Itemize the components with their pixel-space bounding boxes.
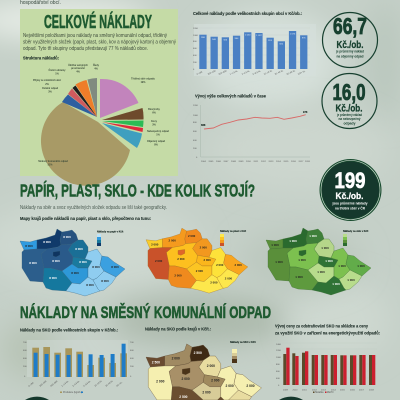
axis labels: 200 (130, 366, 134, 368)
axis labels: 2010 (246, 161, 252, 163)
legend: green map (343, 230, 368, 246)
value labels: 2 500 (194, 351, 202, 355)
axis labels: 2011 (302, 390, 307, 392)
value labels: 8 000 (25, 244, 33, 248)
axis labels: 2017 (359, 390, 365, 392)
legend: brown map (230, 341, 256, 363)
axis labels: 200 (193, 62, 197, 64)
badge: 66,7 Kč per person (322, 12, 378, 68)
axis labels: 800 (276, 364, 280, 366)
axis labels: 600 (276, 371, 280, 373)
pie labels: Tříděný sběr odpadu (131, 78, 155, 80)
badge: 16,0 Kč per person: na nebezpečný (338, 117, 361, 121)
legend: blue map: Náklady na papír v Kč/t (97, 230, 124, 234)
axis labels: 2009 (283, 390, 289, 392)
axis labels: 1000 (193, 35, 199, 37)
axis labels: 800 (193, 41, 197, 43)
value labels: 8 000 (71, 271, 79, 275)
value labels: 1 000 (309, 234, 317, 238)
value labels: 2 500 (179, 395, 188, 399)
axis labels: 2015 (284, 161, 289, 163)
badge: bottom right (279, 397, 303, 400)
legend: ZEVO (327, 391, 334, 394)
value labels: 1 000 (347, 278, 355, 282)
chart: cost trend over time (193, 92, 311, 163)
axis labels: 400 (193, 140, 197, 142)
value labels: 2 000 (188, 234, 196, 238)
value labels: 8 000 (86, 283, 94, 287)
value labels: 2 000 (200, 245, 207, 249)
pie labels: Objemný odpad (147, 140, 166, 143)
data labels: 668 (201, 123, 206, 127)
chart: landfill vs energy recovery price: za využití SKO v zařízení na energetickývyužití odpadů: (275, 330, 380, 336)
axis labels: 2007 (224, 161, 229, 163)
panel: celkové náklady (20, 9, 178, 186)
legend: blue map (97, 230, 124, 246)
axis labels: 0 (24, 376, 26, 378)
axis labels: 100+ tis. (297, 70, 306, 76)
pie labels: Ostatní odpad (42, 87, 59, 90)
value labels: 2 000 (210, 280, 218, 284)
chart title: Náklady na SKO podle velikostních skupin v Kč/ob.: (20, 328, 118, 334)
axis labels: 0 (196, 157, 198, 159)
badge: bottom left (25, 397, 49, 400)
axis labels: 1–1,9 tis. (61, 380, 70, 388)
value labels: 8 000 (52, 259, 60, 263)
pie labels: 4% (94, 68, 99, 70)
value labels: 8 000 (49, 276, 57, 280)
value labels: 2 000 (169, 239, 176, 243)
value labels: 2 000 (177, 257, 185, 261)
value labels: 2 000 (225, 384, 234, 388)
chart title: Celkové náklady podle velikostních skupin obcí v Kč/ob.: (193, 11, 302, 17)
axis labels: 500–999 (219, 70, 228, 76)
value labels: 1 000 (271, 243, 279, 247)
bar values: 913 (268, 40, 273, 42)
axis labels: 2–4,9 tis. (72, 380, 81, 388)
badge: 16,0 Kč per person (322, 74, 377, 128)
pie labels: 4% (76, 70, 81, 74)
axis labels: 20–49 tis. (105, 379, 114, 388)
value labels: 8 000 (63, 235, 71, 239)
axis labels: 2016 (350, 390, 356, 392)
axis labels: 500–999 (50, 380, 59, 388)
axis labels: 0–199 (197, 71, 204, 76)
heading: směsný komunální odpad: NÁKLADY NA SMĚSNÝ KOMUNÁLNÍ ODPAD (20, 303, 271, 322)
legend: orange map: Náklady na plast v Kč/t (220, 230, 246, 233)
pie labels: 3% (48, 90, 53, 94)
badge: 16,0 Kč per person: je průměrný náklad (336, 113, 362, 117)
pie labels: Směsný komunální odpad (38, 160, 68, 163)
chart: landfill vs energy recovery price (275, 324, 380, 394)
badge: 16,0 Kč per person: odpady (344, 122, 356, 126)
value labels (25, 235, 119, 287)
legend: orange map (220, 230, 246, 246)
value labels: 2 000 (211, 378, 220, 382)
axis labels: 20–49 tis. (274, 69, 284, 76)
value labels: 1 000 (332, 282, 340, 286)
value labels: 1 000 (357, 264, 365, 268)
legend: Skládka (315, 391, 324, 394)
axis labels: 2014 (331, 390, 337, 392)
value labels (152, 351, 255, 399)
bar values: 1 050 (245, 34, 251, 36)
bar values: 976 (302, 38, 306, 40)
axis labels: 1200 (193, 105, 199, 107)
axis labels: 2006 (216, 161, 222, 163)
heading: papír, plast, sklo: PAPÍR, PLAST, SKLO - KDE KOLIK STOJÍ? (20, 180, 255, 200)
axis labels: 0–199 (28, 382, 35, 388)
badge: 16,0 Kč per person: 16,0 (332, 79, 366, 105)
bar values: 1 076 (290, 34, 296, 36)
pie labels: 6% (152, 112, 157, 114)
axis labels: 1200 (193, 28, 199, 30)
value labels: 2 000 (181, 377, 190, 381)
axis labels: 5–9,9 tis. (252, 69, 262, 76)
subheading: map caption: Mapy krajů podle nákladů na papír, plast a sklo, přepočteno na tunu: (20, 215, 151, 222)
map: paper plastic glass blue (20, 229, 125, 296)
legend (313, 391, 334, 394)
axis labels: 2016 (291, 161, 297, 163)
badge: 199 Kč per person: na třídění sběr v ČR (335, 206, 366, 210)
axis labels: 400 (276, 378, 280, 380)
axis labels: 1400 (276, 344, 282, 346)
value labels: 8 000 (29, 261, 37, 265)
brown bars (283, 353, 372, 385)
chart: SKO costs by size group (20, 328, 134, 394)
bar values: 964 (235, 38, 239, 40)
pie labels: Nebezpečný odpad (147, 130, 169, 133)
axis labels: 1000 (193, 115, 199, 117)
axis labels: 50+ tis. (116, 381, 123, 388)
axis labels: 10–19 tis. (94, 379, 103, 388)
legend: brown map: Náklady na SKO v Kč/t (230, 341, 256, 344)
badge: 199 Kč per person: Kč./ob. (336, 191, 364, 202)
badge: 66,7 Kč per person: je průměrný náklad (335, 50, 364, 54)
map: paper plastic glass orange (146, 228, 248, 293)
pie labels: Čisticí odměny (48, 69, 66, 72)
chart: cost trend over time: 976 (303, 110, 308, 114)
pie labels: Biovýroby (148, 108, 161, 111)
axis labels: 2008 (231, 161, 237, 163)
red bars (286, 348, 375, 385)
badge: 66,7 Kč per person: Kč./ob. (336, 40, 364, 51)
value labels: 2 000 (202, 390, 211, 394)
pie labels: Příjmy ze zvláštních akcí (33, 79, 61, 82)
tan bars (32, 347, 127, 377)
intro paragraph: sběr využitelných složek (papír, plast, sklo, kov a nápojový karton) a objemný (23, 40, 176, 46)
axis labels: 2009 (238, 161, 244, 163)
axis labels: 700 (23, 342, 27, 344)
axis labels: 0 (193, 69, 195, 71)
axis labels: 400 (193, 55, 197, 57)
value labels: 2 000 (156, 379, 165, 383)
value labels: 1 000 (289, 239, 297, 243)
axis labels (276, 344, 375, 392)
value labels: 2 500 (152, 361, 160, 365)
axis labels: 2018 (305, 161, 311, 163)
pie labels: Údržba veřejných (68, 64, 89, 67)
bars (199, 31, 307, 69)
value labels: 1 000 (275, 260, 283, 264)
blue bars (34, 344, 126, 377)
axis labels: 700 (130, 342, 134, 344)
axis labels: 1–1,9 tis. (229, 69, 239, 76)
pie labels: Ředy (93, 64, 100, 67)
pie labels: 2% (45, 83, 50, 86)
value labels: 1 000 (325, 259, 333, 263)
bar values (201, 34, 306, 46)
heading: celkové náklady: CELKOVÉ NÁKLADY (44, 11, 152, 32)
axis labels: 600 (193, 48, 197, 50)
bar values: 946 (212, 39, 217, 41)
badge: 16,0 Kč per person: Kč./ob. (336, 104, 363, 114)
axis labels: 2014 (276, 161, 282, 163)
axis labels: 2005 (208, 161, 214, 163)
axis labels: 2004 (201, 161, 207, 163)
axis labels: 400 (130, 358, 134, 360)
axis labels: 2017 (298, 161, 304, 163)
axis labels (23, 342, 134, 388)
axis labels: 2018 (369, 390, 375, 392)
map: SKO costs brown (146, 344, 262, 400)
value labels: 8 000 (111, 265, 119, 269)
geography text: Náklady na sběr a svoz využitelných složek odpadu se liší také geograficky. (20, 205, 167, 211)
axis labels: 0 (278, 385, 280, 387)
axis labels: 600 (130, 350, 134, 352)
pie labels: Kovy (151, 120, 158, 123)
value labels (271, 234, 365, 286)
intro paragraph: odpad. Tyto tři skupiny odpadu představují 77 % nákladů obce. (23, 45, 148, 52)
axis labels: 200 (193, 148, 197, 150)
chart title: Vývoj výše celkových nákladů v čase (195, 92, 266, 100)
intro line: hospodářství obcí. (20, 0, 61, 6)
value labels: 2 000 (246, 384, 255, 388)
chart title: SKO by region: Náklady na SKO podle krajů v Kč/t.: (145, 326, 211, 332)
value labels: 8 000 (101, 279, 109, 283)
axis labels: 0 (130, 376, 132, 378)
axis labels: 400 (23, 358, 27, 360)
value labels: 2 000 (235, 263, 242, 267)
axis labels: 200–499 (39, 380, 48, 388)
pie labels: 51% (48, 164, 53, 166)
axis labels: 800 (193, 122, 197, 124)
value labels: 2 000 (151, 243, 159, 247)
axis labels (193, 28, 306, 76)
bar values: 1 037 (256, 35, 263, 37)
axis labels: 5–9,9 tis. (83, 380, 92, 388)
badge: 66,7 Kč per person: 66,7 (333, 13, 367, 39)
value labels: 2 000 (216, 263, 224, 267)
value labels: 1 000 (295, 275, 303, 279)
axis labels: 2015 (340, 390, 346, 392)
value labels: 8 000 (43, 240, 51, 244)
value labels: 2 000 (196, 269, 203, 273)
pie labels: 3% (152, 124, 157, 126)
axis labels: 2013 (321, 390, 327, 392)
pie labels: 19% (141, 81, 146, 84)
axis labels: 50–99 tis. (286, 69, 296, 76)
badge: 66,7 Kč per person: na objemný odpad (336, 54, 364, 58)
value labels: 1 000 (317, 270, 325, 274)
value labels: 2 000 (203, 258, 211, 262)
legend: green map: Náklady na sklo v Kč/t (343, 230, 368, 233)
legend: Produkce (kg/ob.) (63, 391, 82, 394)
bar values: 996 (201, 37, 206, 39)
value labels (151, 234, 242, 284)
trend line (204, 115, 306, 129)
axis labels: 2013 (268, 161, 274, 163)
value labels: 8 000 (92, 265, 100, 269)
axis labels: 2012 (261, 161, 267, 163)
axis labels: 2012 (312, 390, 318, 392)
intro paragraph: Největšími položkami jsou náklady na směsný komunální odpad, tříděný (23, 33, 167, 39)
badge: 199 Kč per person: 199 (334, 168, 366, 193)
badge: 199 Kč per person: jsou průměrné náklady (332, 202, 368, 206)
axis labels: 2–4,9 tis. (241, 69, 251, 76)
axis labels (193, 105, 311, 163)
subheading: struktura nákladů: Struktura nákladů: (23, 54, 59, 62)
pie labels: 1% (156, 134, 161, 136)
value labels: 2 000 (225, 277, 232, 281)
value labels: 8 000 (75, 247, 83, 251)
chart title: Vývoj ceny za odstraňování SKO na skládce a ceny (275, 324, 368, 330)
chart: total costs by municipality size (193, 11, 316, 76)
value labels: 2 000 (174, 274, 182, 278)
axis labels: 10–19 tis. (263, 69, 273, 76)
value labels: 1 000 (298, 258, 306, 262)
value labels: 1 000 (338, 264, 346, 268)
pie labels: 8% (154, 144, 159, 146)
axis labels: 200 (23, 366, 27, 368)
value labels: 2 000 (172, 356, 180, 360)
map: paper plastic glass green (266, 228, 371, 295)
axis labels: 600 (23, 350, 27, 352)
pie labels: prostranství (71, 67, 85, 70)
value labels: 2 000 (155, 259, 163, 263)
axis labels: 2010 (292, 390, 298, 392)
intro paragraph (23, 33, 176, 52)
pie labels: 1% (55, 72, 60, 76)
badge: 199 Kč per person (320, 159, 382, 221)
pie chart: struktura nákladů (33, 64, 169, 186)
axis labels: 200–499 (208, 70, 217, 76)
axis labels: 1000 (276, 357, 282, 359)
value labels: 2 000 (207, 364, 215, 368)
axis labels: 600 (193, 131, 197, 133)
bar values: 926 (223, 40, 228, 42)
axis labels: 1200 (276, 350, 282, 352)
bar values: 822 (279, 44, 284, 46)
value labels: 1 000 (321, 246, 329, 250)
value labels: 8 000 (79, 260, 87, 264)
axis labels: 2011 (254, 161, 259, 163)
pie labels (33, 64, 169, 166)
